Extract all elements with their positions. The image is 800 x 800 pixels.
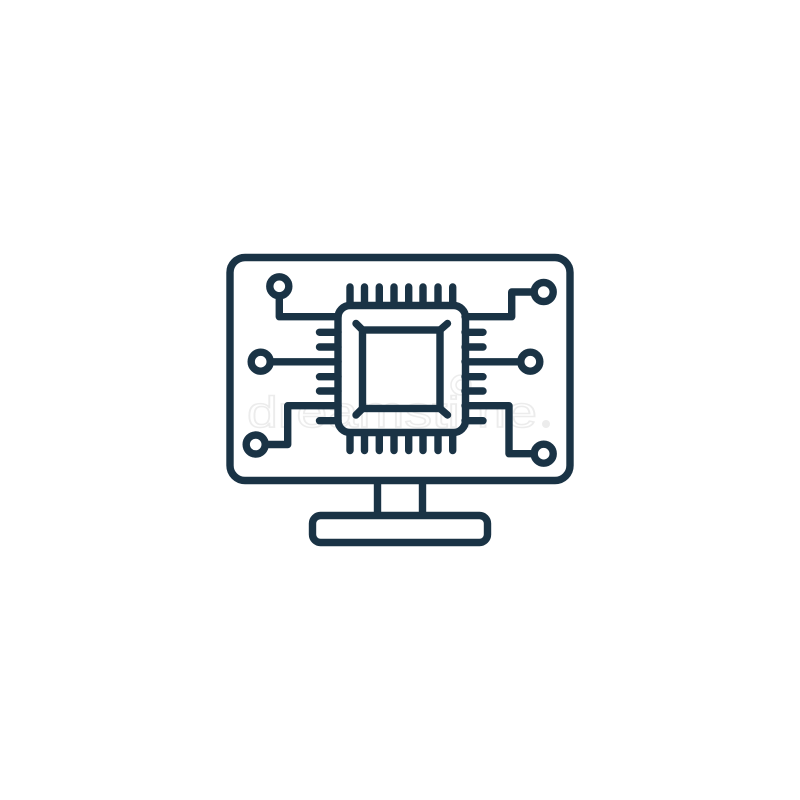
circuit trace: middle left: [251, 352, 338, 371]
chip body: [338, 306, 466, 432]
watermark: [247, 375, 550, 437]
chip inner corner marks: [356, 324, 448, 415]
monitor base: [312, 516, 488, 542]
circuit trace: bottom left: [246, 406, 338, 454]
chip right pins: [465, 332, 483, 421]
circuit trace: bottom right: [465, 406, 553, 463]
monitor screen: [230, 258, 570, 480]
circuit trace: top left: [270, 277, 338, 317]
chip left pins: [320, 332, 338, 421]
circuit trace: middle right: [465, 352, 540, 371]
chip inner square: [362, 330, 440, 408]
monitor stand: [378, 484, 422, 513]
icon: computer monitor with circuit chip: [230, 258, 570, 542]
circuit trace: top right: [465, 282, 553, 317]
watermark: dreamstime: [247, 388, 537, 437]
chip bottom pins: [350, 433, 453, 450]
chip top pins: [350, 287, 453, 305]
